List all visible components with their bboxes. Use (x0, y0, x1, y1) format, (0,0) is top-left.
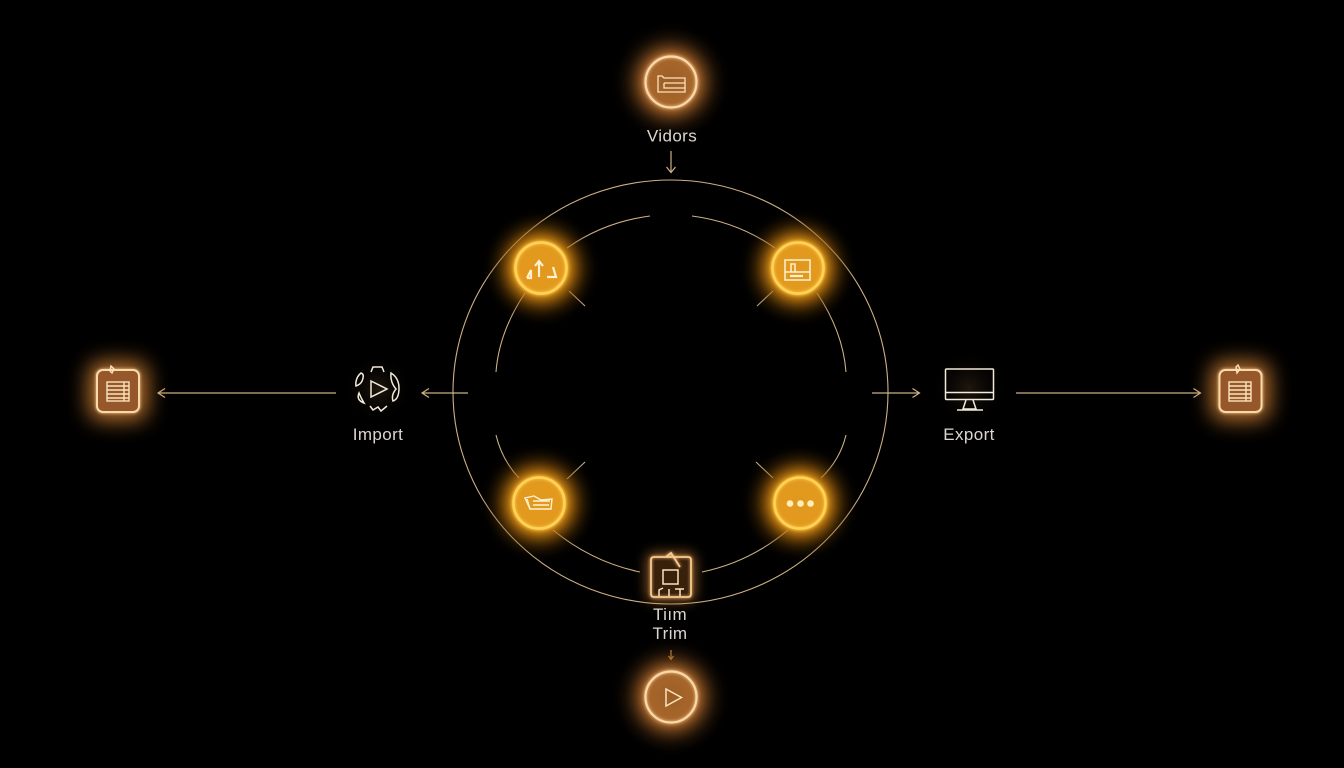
arrow: trim down (668, 650, 674, 660)
node: import icon (342, 353, 414, 425)
node: trim (646, 552, 696, 602)
label: Import: Import (353, 425, 403, 444)
icon: folder (658, 76, 685, 92)
icon: list sheet (1229, 365, 1251, 401)
inner ring segments (496, 216, 846, 572)
icon: triangles and arrow (527, 261, 556, 278)
arrow: to right document (1016, 388, 1200, 398)
icon: media panel (785, 260, 810, 280)
node: play (609, 635, 733, 759)
icon: list sheet (107, 366, 129, 401)
label: Trim: Trim (653, 624, 687, 643)
node: export icon (929, 348, 1009, 428)
outer ring (453, 180, 888, 604)
label: Tim: Tiım (653, 605, 687, 624)
node: top video folder (609, 20, 733, 144)
arrow: top down (666, 151, 676, 172)
icon: play triangle (666, 689, 682, 706)
icon: play with broken ring (356, 367, 399, 411)
label: Videos: Vidors (647, 126, 697, 146)
node: top right media panel (736, 206, 860, 330)
node: left document (88, 361, 148, 421)
arrow: to left document (158, 388, 336, 398)
icon: monitor (946, 369, 994, 410)
node: top left shapes (479, 206, 603, 330)
icon: clip (525, 496, 552, 509)
icon: trim frame (659, 570, 684, 596)
node: bottom right more (738, 441, 862, 565)
icon: three dots (787, 500, 814, 507)
label: Export: Export (943, 425, 995, 444)
arrow: ring to export (872, 388, 920, 398)
arrow: ring to import (422, 388, 468, 398)
node: bottom left clip (477, 441, 601, 565)
node: right document (1210, 361, 1270, 421)
radial tick marks (567, 291, 773, 479)
